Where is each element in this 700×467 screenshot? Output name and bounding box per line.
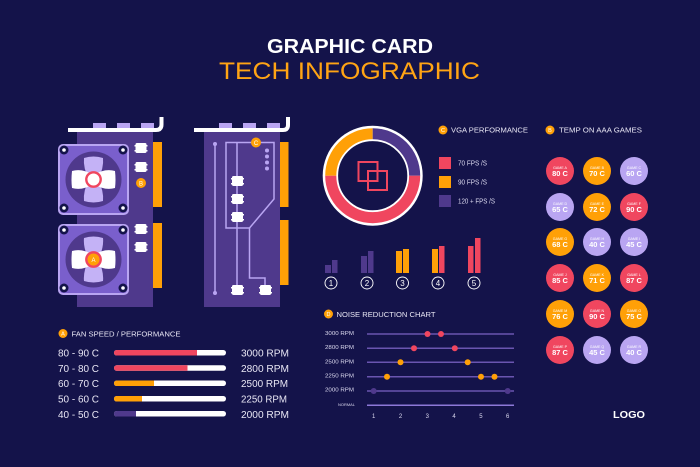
icon: bottom fan: A [91,258,96,264]
temperature grid: 45 C [626,240,643,249]
temperature grid: GAME P [553,345,568,349]
icon: bottom fan [58,224,129,295]
bar chart: performance: 5 [472,279,477,288]
heading: fan speed: FAN SPEED / PERFORMANCE [72,330,180,338]
heading: VGA performance: C [441,128,445,134]
temperature grid: 90 C [626,205,643,214]
fan speed table [58,348,289,421]
fan speed table: 2800 RPM [241,364,289,375]
temperature grid: GAME H [590,237,604,241]
bar chart: performance [325,238,480,289]
temperature grid: GAME N [590,309,604,313]
memory chips [134,143,148,252]
noise reduction chart: 3000 RPM [325,331,354,337]
fan speed table: 3000 RPM [241,348,289,360]
icon: overlapping squares [358,162,387,190]
temperature grid: GAME O [627,309,641,313]
temperature grid: GAME B [590,166,605,170]
noise reduction chart: 2 [399,414,403,420]
temperature grid: 72 C [589,205,606,214]
temperature grid: 65 C [552,205,569,214]
temperature grid: 75 C [626,312,643,321]
temperature grid: 45 C [589,348,606,357]
fan speed table: 40 - 50 C [58,410,99,421]
noise reduction chart: 2000 RPM [325,388,354,394]
noise reduction chart: 4 [452,414,456,420]
temperature grid: 40 C [626,348,643,357]
circuit traces [215,142,274,293]
temperature grid: 90 C [589,312,606,321]
badge B: B [139,181,143,187]
noise reduction chart: 2800 RPM [325,345,354,351]
fan speed table: 2000 RPM [241,410,289,421]
noise reduction chart: 3 [426,414,430,420]
panel: graphics card front [58,117,162,307]
bar chart: performance: 1 [329,279,334,288]
temperature grid: GAME A [553,166,567,170]
temperature grid: GAME L [627,273,641,277]
legend: fps: 90 FPS /S [458,180,487,186]
heading: temp on AAA games: TEMP ON AAA GAMES [559,126,642,135]
fan speed table: 60 - 70 C [58,379,99,390]
noise reduction chart: 2250 RPM [325,374,354,380]
noise reduction chart: 6 [506,414,510,420]
noise reduction chart: NORMAL [338,403,355,407]
badge B [136,178,146,188]
temperature grid: 85 C [552,276,569,285]
fan speed table: 2500 RPM [241,379,288,390]
fan speed table: 70 - 80 C [58,364,99,375]
temperature grid: GAME R [627,345,641,349]
temperature grid: GAME M [553,309,567,313]
heading: VGA performance: VGA PERFORMANCE [451,126,528,135]
temperature grid: 87 C [552,348,569,357]
badge C: C [254,141,259,147]
temperature grid: GAME D [553,202,567,206]
temperature grid: GAME K [590,273,605,277]
temperature grid: 40 C [589,240,606,249]
temperature grid: 71 C [589,276,606,285]
fan speed table: 2250 RPM [241,394,287,406]
temperature grid: GAME Q [590,345,604,349]
noise reduction chart [325,331,514,420]
temperature grid [546,157,648,364]
legend: fps: 120 + FPS /S [458,198,495,206]
temperature grid: 68 C [552,240,569,249]
temperature grid: 80 C [552,169,569,178]
bar chart: performance: 2 [365,279,370,288]
noise reduction chart: 1 [372,414,376,420]
temperature grid: GAME J [553,273,567,277]
heading: fan speed: A [61,332,65,338]
bar chart: performance: 4 [436,279,441,288]
donut chart [323,126,423,226]
circuit chips [231,176,272,295]
panel: graphics card back [194,117,288,307]
temperature grid: 60 C [626,169,643,178]
badge C [251,138,261,148]
heading: noise reduction: NOISE REDUCTION CHART [336,310,436,319]
temperature grid: GAME I [628,237,640,241]
icon: top fan [58,144,129,215]
heading: temp on AAA games: B [548,128,552,134]
logo: LOGO [613,409,645,421]
temperature grid: 70 C [589,169,606,178]
fan speed table: 80 - 90 C [58,348,99,360]
temperature grid: GAME F [627,202,642,206]
temperature grid: GAME G [553,237,567,241]
temperature grid: 76 C [552,312,569,321]
legend: fps: 70 FPS /S [458,160,487,168]
legend: fps [439,157,495,207]
temperature grid: 87 C [626,276,643,285]
heading: noise reduction: D [327,312,331,318]
noise reduction chart: 5 [479,414,483,420]
temperature grid: GAME E [590,202,605,206]
title: TECH INFOGRAPHIC [219,58,480,85]
fan speed table: 50 - 60 C [58,394,99,406]
bar chart: performance: 3 [400,279,405,288]
temperature grid: GAME C [627,166,641,170]
noise reduction chart: 2500 RPM [325,360,354,366]
title [219,36,480,85]
title: GRAPHIC CARD [267,36,433,58]
